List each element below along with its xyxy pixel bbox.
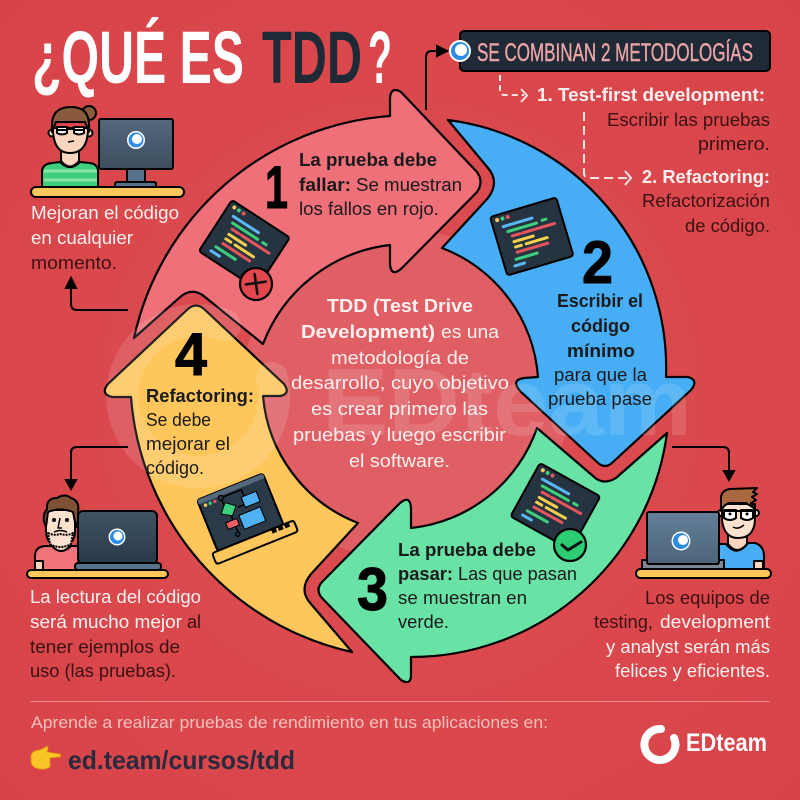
text: top-left benefit: momento. [31, 253, 117, 273]
person: man at gray laptop [636, 488, 771, 578]
text: bottom-right benefit: felices y eficientes. [615, 661, 770, 681]
icon: code window failing test [199, 200, 290, 300]
step 1 text: los fallos en rojo. [299, 199, 439, 219]
shirt [42, 162, 98, 187]
methodology 2 text: 2. Refactoring: [642, 167, 770, 187]
step 1 text [299, 150, 462, 219]
dashed arrow: to second method [584, 112, 631, 185]
methodology 1 text: Escribir las pruebas [607, 110, 770, 130]
arrow: up to top-left benefit [66, 278, 128, 310]
laptop [642, 560, 724, 569]
step 4 text [146, 386, 254, 478]
icon: pass badge [554, 529, 586, 561]
step 2 text: para que la [554, 365, 648, 385]
methodology 2 text: Refactorización [642, 191, 770, 211]
step 1 text: Se muestran [356, 175, 462, 195]
step 1 text: fallar: [299, 175, 351, 195]
text: bottom-left benefit: uso (las pruebas). [30, 661, 176, 681]
neck and head [728, 532, 747, 550]
text: top-left benefit: en cualquier [31, 228, 133, 248]
cycle diagram [105, 90, 694, 682]
central definition text: TDD (Test Drive [327, 296, 473, 316]
arrow: to methodology box [426, 46, 447, 110]
watermark logo [122, 320, 692, 472]
step 1 text: La prueba debe [299, 150, 437, 170]
text: top-left benefit [31, 203, 179, 273]
methodology heading box [449, 31, 770, 71]
icon: code window passing test [510, 463, 600, 561]
arrow 1: pink [134, 90, 480, 344]
head [82, 106, 96, 120]
watermark logo: EDteam [322, 349, 692, 456]
shirt [717, 543, 764, 569]
step 2 text: mínimo [567, 341, 635, 361]
step 3 text [398, 540, 577, 632]
laptop [78, 511, 157, 564]
step 3 text: se muestran en [398, 588, 527, 608]
methodology 1 text: 1. Test-first development: [537, 85, 765, 105]
step 4 text: código. [146, 458, 204, 478]
arrow: down to bottom-left person [66, 447, 128, 489]
desk [27, 570, 168, 578]
text: bottom-right benefit: testing, [594, 612, 653, 632]
person: man at dark laptop [27, 496, 168, 578]
step 2 text: Escribir el [557, 291, 643, 311]
text: bottom-left benefit: será mucho mejor [30, 612, 182, 632]
neck [61, 150, 79, 166]
text: bottom-right benefit: y analyst serán más [606, 637, 770, 657]
arrow 3: green [318, 428, 667, 682]
methodology 1 text [537, 85, 770, 154]
logo: EDteam: EDteam [686, 729, 767, 757]
central definition text: metodología de [331, 348, 469, 368]
text: bottom-left benefit: tener ejemplos de [30, 637, 180, 657]
text: bottom-right benefit: development [660, 612, 770, 632]
central definition text [291, 296, 509, 471]
person: woman at monitor [31, 106, 184, 197]
step 2 text [548, 291, 652, 409]
text: bottom-left benefit: al [187, 612, 201, 632]
step 3 text: verde. [398, 612, 449, 632]
central definition text: es una [441, 322, 500, 342]
step 4 text: mejorar el [146, 434, 230, 454]
step 3 text: Las que pasan [458, 564, 577, 584]
shirt [35, 546, 80, 570]
step 3 text: La prueba debe [398, 540, 536, 560]
step 1 number: 1 [265, 154, 288, 221]
icon: EDteam badge [449, 40, 471, 62]
central circle background [240, 230, 570, 560]
icon: fail badge [240, 268, 272, 300]
methodology 2 text: de código. [685, 216, 770, 236]
arrow 4: yellow [105, 306, 358, 652]
step 4 number: 4 [175, 321, 208, 388]
text: bottom-left benefit [30, 587, 201, 681]
desk [636, 569, 771, 578]
step 3 text: pasar: [398, 564, 453, 584]
methodology 2 text [642, 167, 770, 236]
logo: EDteam [644, 729, 767, 760]
title: ¿QUÉ ES [32, 16, 244, 99]
text: bottom-left benefit: La lectura del código [30, 587, 201, 607]
central definition text: pruebas y luego escribir [293, 425, 506, 445]
title: ? [368, 16, 392, 99]
arrow: down to bottom-right person [672, 447, 734, 480]
central definition text: Development) [301, 322, 435, 342]
text: bottom-right benefit [594, 588, 770, 681]
arrow 2: blue [442, 120, 694, 466]
icon: laptop with flowchart [191, 469, 298, 564]
step 2 text: prueba pase [548, 389, 652, 409]
step 2 number: 2 [582, 229, 613, 296]
footer link: ed.team/cursos/tdd [68, 745, 295, 775]
head [52, 536, 70, 551]
step 3 number: 3 [357, 556, 388, 623]
text: bottom-right benefit: Los equipos de [645, 588, 770, 608]
step 4 text: Se debe [146, 410, 211, 430]
icon: pointing hand [31, 746, 61, 769]
text: top-left benefit: Mejoran el código [31, 203, 179, 223]
title: TDD [262, 16, 362, 99]
step 4 text: Refactoring: [146, 386, 254, 406]
monitor [99, 119, 173, 187]
central definition text: el software. [349, 451, 450, 471]
desk [31, 187, 184, 197]
central definition text: es crear primero las [311, 399, 488, 419]
icon: code window in blue arrow [490, 197, 573, 275]
step 2 text: código [571, 316, 630, 336]
central definition text: desarrollo, cuyo objetivo [291, 373, 509, 393]
footer prompt: Aprende a realizar pruebas de rendimiento en tus aplicaciones en: [31, 713, 548, 732]
methodology 1 text: primero. [698, 134, 770, 154]
dashed arrow: to first method [500, 75, 527, 102]
